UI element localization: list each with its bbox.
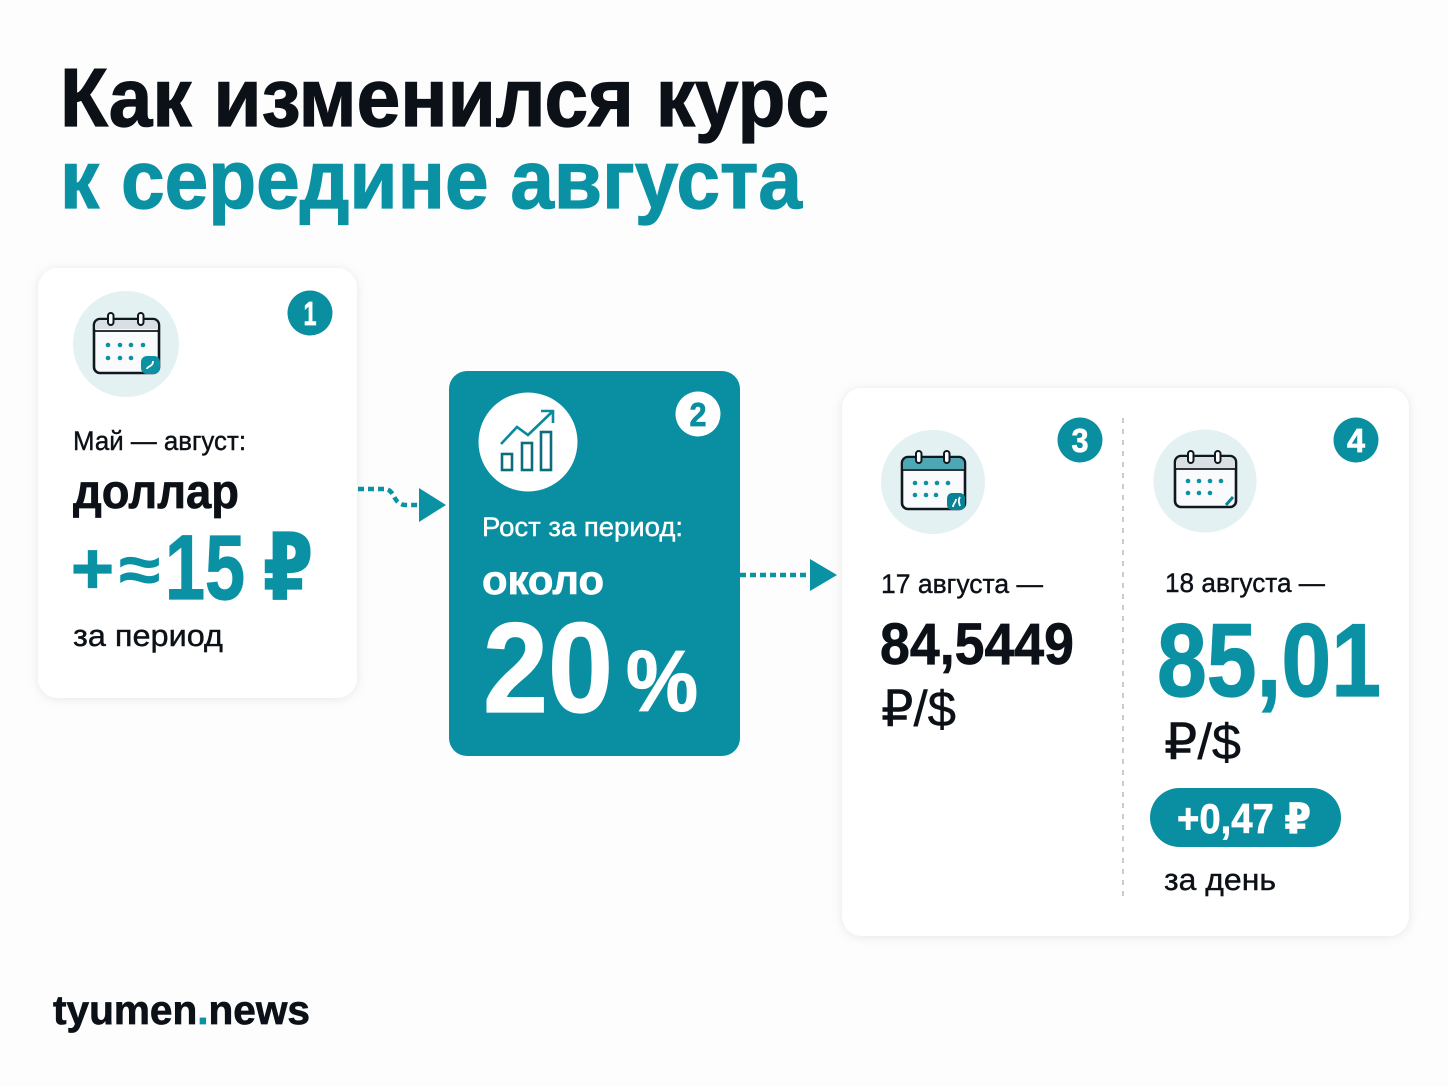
value: +≈15 ₽: ≈ — [119, 532, 160, 606]
value: +≈15 ₽: 15 — [165, 517, 245, 619]
label: per day: за день — [1164, 862, 1276, 897]
icon: calendar 1 — [73, 291, 179, 397]
unit: rub per usd 4: ₽/$ — [1164, 714, 1241, 770]
badge 1 — [288, 290, 332, 336]
value: +≈15 ₽ — [71, 517, 313, 619]
unit: rub per usd 3: ₽/$ — [881, 681, 956, 737]
label: for the period: за период — [73, 618, 223, 653]
icon: growth chart — [478, 392, 578, 492]
value: 85,01: 85,01 — [1157, 603, 1381, 719]
badge 4 — [1334, 418, 1378, 462]
label: May to August: Май — август: — [73, 426, 246, 456]
label: dollar: доллар — [73, 466, 239, 519]
label: growth over the period: Рост за период: — [482, 512, 683, 542]
logo: tyumen.news — [53, 987, 310, 1033]
pill: +0,47 ₽: +0,47 ₽ — [1177, 795, 1311, 842]
value: 84,5449: 84,5449 — [880, 612, 1074, 677]
label: August 18: 18 августа — — [1165, 568, 1325, 598]
panel 2: growth — [449, 371, 740, 756]
arrow 1 to 2 — [358, 488, 446, 522]
panel 1: May to August — [38, 268, 357, 698]
label: August 17: 17 августа — — [881, 569, 1043, 599]
label: about: около — [482, 557, 604, 603]
value: 20%: 20 — [483, 597, 613, 740]
icon: calendar 4 — [1154, 430, 1256, 532]
badge 4: 4 — [1347, 422, 1366, 459]
badge 3 — [1058, 418, 1102, 462]
value: 20%: % — [626, 634, 698, 730]
title — [60, 51, 829, 226]
title: Как изменился курс — [60, 51, 829, 144]
badge 1: 1 — [304, 295, 316, 332]
title: к середине августа — [60, 133, 803, 226]
pill: +0,47 ₽ — [1150, 788, 1341, 847]
icon: calendar 3 — [881, 430, 985, 534]
arrow 2 to 3 — [740, 559, 837, 591]
value: +≈15 ₽: ₽ — [263, 517, 313, 619]
value: +≈15 ₽: + — [71, 529, 114, 609]
panel 3-4: dates — [842, 388, 1409, 936]
badge 2 — [676, 392, 720, 436]
badge 2: 2 — [690, 396, 706, 433]
badge 3: 3 — [1072, 422, 1088, 459]
value: 20% — [483, 597, 698, 740]
